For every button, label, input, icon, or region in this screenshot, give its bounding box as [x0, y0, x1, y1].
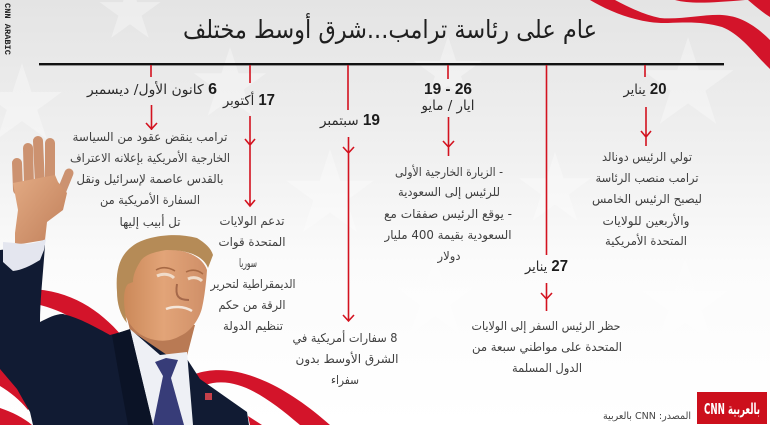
timeline entry: 17 October: المتحدة قوات — [218, 235, 286, 250]
face — [120, 250, 207, 341]
timeline entry: 20 January: 20 يناير — [623, 81, 666, 98]
timeline entry: 19 September: الشرق الأوسط بدون — [296, 351, 398, 367]
timeline entry: 6 December: بالقدس عاصمة لإسرائيل ونقل — [76, 172, 224, 187]
timeline entry: 20 January — [592, 65, 702, 249]
timeline entry: 19-26 May: ايار / مايو — [421, 98, 474, 114]
source note: المصدر: CNN بالعربية — [603, 411, 691, 422]
timeline entry: 27 January: حظر الرئيس السفر إلى الولايات — [472, 319, 620, 334]
timeline entry: 6 December: تل أبيب إليها — [120, 214, 180, 229]
timeline entry: 19-26 May: السعودية بقيمة 400 مليار — [384, 228, 512, 243]
timeline entry: 19-26 May: دولار — [437, 249, 460, 264]
timeline entry: 20 January: تولي الرئيس دونالد — [602, 150, 692, 165]
timeline entry: 6 December — [70, 65, 230, 229]
timeline entry: 6 December: السفارة الأمريكية من — [100, 192, 200, 208]
timeline entry: 20 January: والأربعين للولايات — [602, 213, 690, 229]
timeline entry: 17 October: 17 أكتوبر — [222, 91, 275, 109]
suit — [0, 245, 249, 425]
timeline entry: 19 September: سفراء — [331, 373, 359, 388]
figure: Donald Trump waving — [0, 141, 249, 425]
timeline entry: 17 October — [210, 65, 296, 334]
source watermark: CNN Arabic vertical: CNN ARABIC — [2, 3, 11, 55]
shirt cuff — [3, 239, 46, 271]
flag stripes: top right — [590, 0, 770, 69]
flag stripes: bottom left — [0, 289, 330, 425]
neck — [127, 318, 195, 356]
timeline entry: 20 January: المتحدة الأمريكية — [605, 233, 687, 249]
timeline entry: 19 September: 8 سفارات أمريكية في — [292, 330, 398, 346]
timeline entry: 17 October: تنظيم الدولة — [223, 319, 283, 334]
timeline entry: 17 October: سوريا — [239, 256, 257, 271]
timeline entry: 6 December: ترامب ينقض عقود من السياسة — [72, 130, 228, 145]
timeline entry: 20 January: ترامب منصب الرئاسة — [596, 171, 698, 186]
timeline entry: 17 October: الرقة من حكم — [218, 298, 286, 313]
timeline entry: 19 September: 19 سبتمبر — [319, 112, 380, 129]
timeline entry: 27 January — [472, 65, 622, 376]
logo: CNN Arabic — [697, 392, 767, 424]
timeline entry: 17 October: تدعم الولايات — [220, 214, 284, 229]
timeline axis — [39, 63, 724, 65]
timeline entry: 20 January: ليصبح الرئيس الخامس — [592, 192, 702, 207]
timeline entry: 6 December: 6 كانون الأول/ ديسمبر — [86, 81, 217, 98]
raised hand — [13, 141, 69, 245]
timeline entry: 27 January: الدول المسلمة — [512, 361, 582, 376]
necktie — [153, 358, 184, 425]
eyes, nose and mouth — [157, 274, 202, 281]
flag pin — [205, 393, 212, 400]
timeline entry: 19-26 May: 19 - 26 — [424, 81, 472, 98]
lapel — [112, 329, 153, 425]
timeline entry: 19 September — [292, 65, 398, 388]
timeline entry: 6 December: الخارجية الأمريكية بإعلانه الاعتراف — [70, 150, 230, 166]
timeline entry: 19-26 May: للرئيس إلى السعودية — [398, 185, 500, 200]
title: عام على رئاسة ترامب...شرق أوسط مختلف — [183, 12, 597, 45]
timeline entry: 19-26 May: - الزيارة الخارجية الأولى — [395, 164, 503, 180]
timeline entry: 19-26 May — [384, 65, 512, 264]
timeline entry: 27 January: 27 يناير — [524, 258, 568, 275]
hair — [117, 235, 213, 323]
timeline entry: 17 October: الديمقراطية لتحرير — [210, 277, 296, 292]
timeline entry: 27 January: المتحدة على مواطني سبعة من — [472, 340, 622, 355]
shirt collar and front — [130, 329, 193, 425]
timeline entry: 19-26 May: - يوقع الرئيس صفقات مع — [384, 207, 512, 222]
